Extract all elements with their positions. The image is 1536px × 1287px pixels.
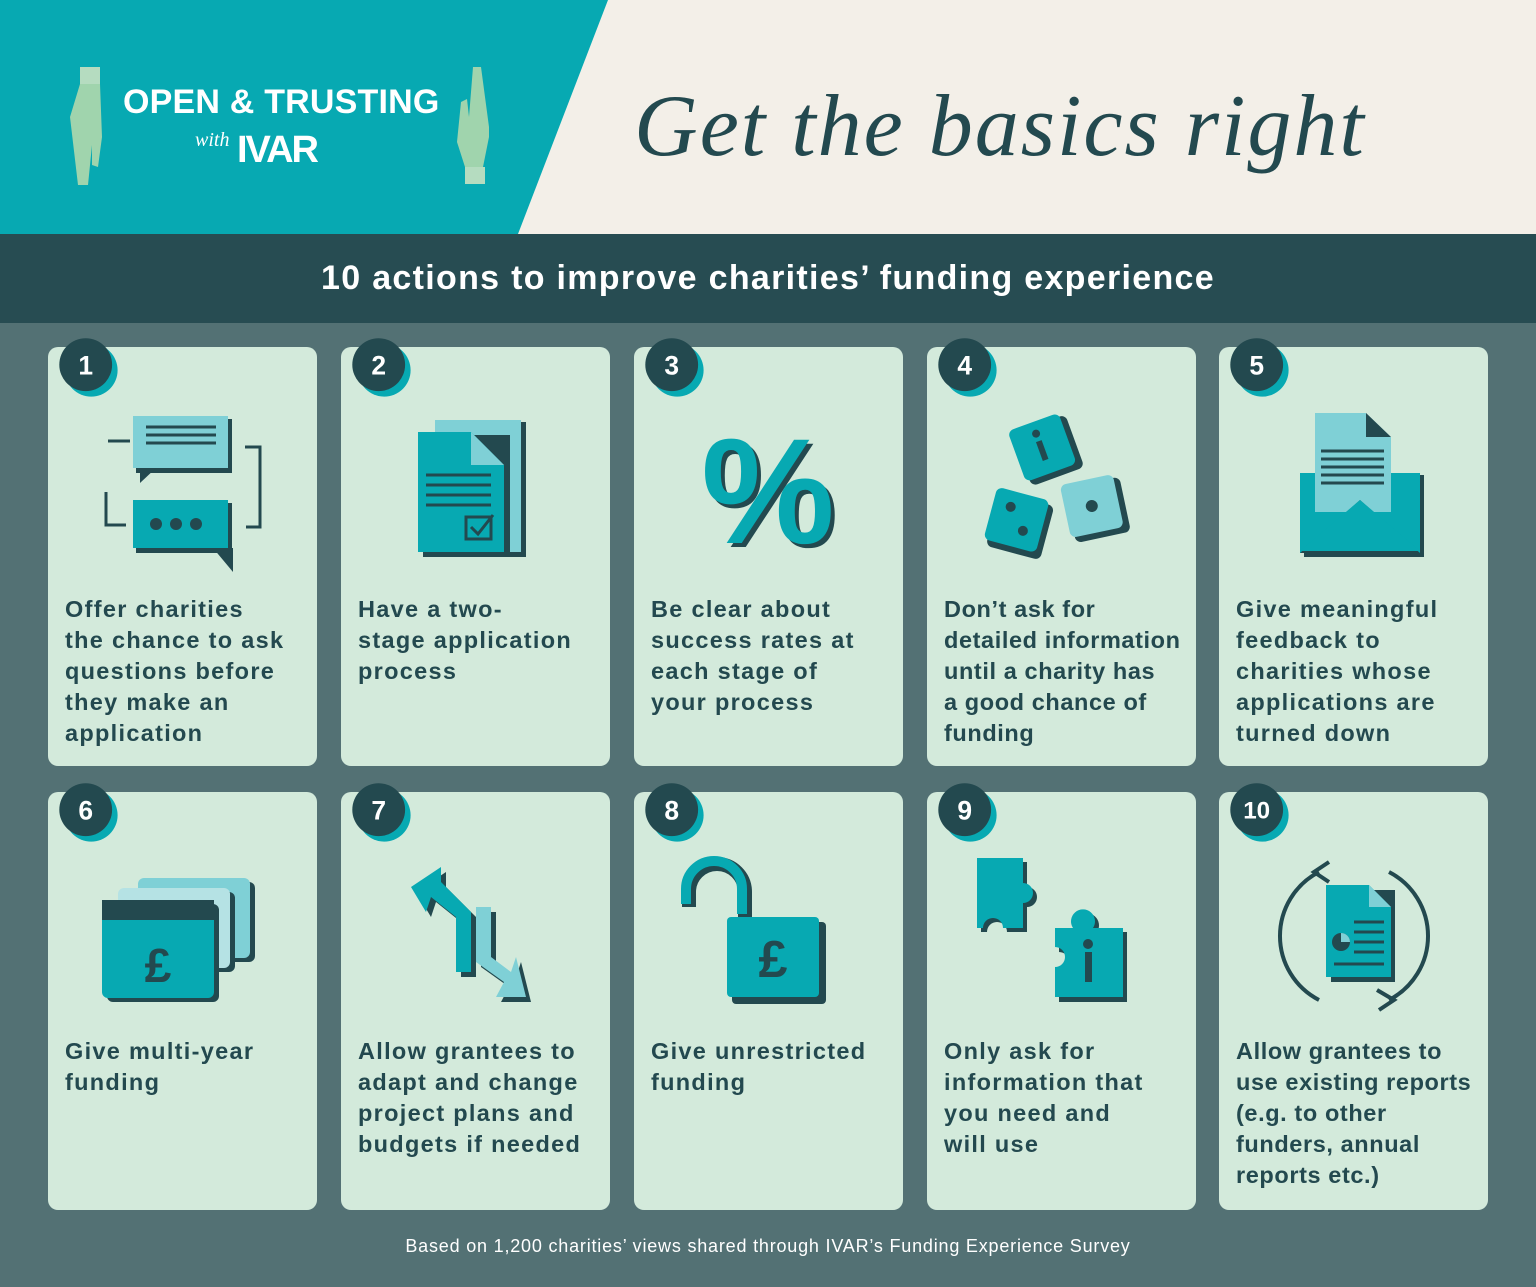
- icon: left hand: [70, 67, 102, 185]
- card 8: [634, 792, 903, 1210]
- text 7: budgets if needed: [358, 1131, 581, 1157]
- subtitle band: [0, 234, 1536, 323]
- text 6: funding: [65, 1069, 160, 1095]
- card 2: [341, 347, 610, 766]
- icon: percent: %: [701, 407, 835, 575]
- footer note: Based on 1,200 charities’ views shared through IVAR’s Funding Experience Survey: [405, 1236, 1131, 1256]
- text 8: funding: [651, 1069, 746, 1095]
- text 1: application: [65, 720, 203, 746]
- text 10: funders, annual: [1236, 1131, 1420, 1157]
- text 6: Give multi-year: [65, 1038, 254, 1064]
- icon: padlock: [681, 856, 826, 1004]
- text 3: your process: [651, 689, 814, 715]
- number 4: [938, 338, 997, 397]
- logo: IVAR: [237, 129, 317, 171]
- logo text: OPEN & TRUSTING: [123, 83, 440, 121]
- text 9: [944, 1038, 1144, 1157]
- number 1: [59, 338, 118, 397]
- icon: dice: [984, 414, 1130, 559]
- text 5: feedback to: [1236, 627, 1381, 653]
- number 6: 6: [78, 796, 93, 826]
- icon: calendars: [102, 878, 255, 1002]
- card 6: [48, 792, 317, 1210]
- text 9: will use: [944, 1131, 1039, 1157]
- text 5: applications are: [1236, 689, 1436, 715]
- text 4: until a charity has: [944, 658, 1155, 684]
- number 6: [59, 783, 118, 842]
- text 10: [1236, 1038, 1471, 1188]
- text 5: Give meaningful: [1236, 596, 1438, 622]
- icon: arrows: [411, 867, 531, 1002]
- icon: percent: %: [705, 411, 839, 579]
- card 1: [48, 347, 317, 766]
- number 8: 8: [664, 796, 679, 826]
- title: Get the basics right: [634, 78, 1366, 175]
- number 9: 9: [957, 796, 972, 826]
- text 5: charities whose: [1236, 658, 1432, 684]
- header teal panel: [0, 0, 608, 234]
- number 5: [1230, 338, 1289, 397]
- number 7: 7: [371, 796, 386, 826]
- text 2: [358, 596, 572, 684]
- text 4: detailed information: [944, 627, 1181, 653]
- text 10: Allow grantees to: [1236, 1038, 1442, 1064]
- text 8: Give unrestricted: [651, 1038, 866, 1064]
- text 8: [651, 1038, 866, 1095]
- icon: right hand: [457, 67, 489, 184]
- text 2: stage application: [358, 627, 572, 653]
- text 3: Be clear about: [651, 596, 831, 622]
- text 1: questions before: [65, 658, 275, 684]
- text 9: Only ask for: [944, 1038, 1095, 1064]
- text 4: [944, 596, 1181, 746]
- text 4: Don’t ask for: [944, 596, 1095, 622]
- text 7: Allow grantees to: [358, 1038, 576, 1064]
- text 1: Offer charities: [65, 596, 244, 622]
- text 3: [651, 596, 855, 715]
- icon: cycle report: [1278, 860, 1430, 1012]
- text 10: use existing reports: [1236, 1069, 1471, 1095]
- text 9: information that: [944, 1069, 1144, 1095]
- text 3: each stage of: [651, 658, 818, 684]
- logo: with: [195, 129, 229, 151]
- number 9: [938, 783, 997, 842]
- card 5: [1219, 347, 1488, 766]
- card 10: [1219, 792, 1488, 1210]
- card 4: [927, 347, 1196, 766]
- text 4: funding: [944, 720, 1034, 746]
- text 7: project plans and: [358, 1100, 575, 1126]
- text 2: process: [358, 658, 457, 684]
- number 1: 1: [78, 351, 93, 381]
- icon: puzzle: [977, 858, 1127, 1002]
- icon: documents: [418, 420, 526, 557]
- card 7: [341, 792, 610, 1210]
- text 1: they make an: [65, 689, 230, 715]
- header background: [0, 0, 1536, 234]
- text 6: [65, 1038, 254, 1095]
- icon: padlock: £: [759, 931, 788, 989]
- number 10: [1230, 783, 1289, 842]
- number 5: 5: [1249, 351, 1264, 381]
- text 1: [65, 596, 284, 746]
- text 4: a good chance of: [944, 689, 1147, 715]
- number 10: 10: [1243, 797, 1270, 824]
- card 9: [927, 792, 1196, 1210]
- text 7: adapt and change: [358, 1069, 579, 1095]
- text 5: turned down: [1236, 720, 1391, 746]
- number 3: 3: [664, 351, 679, 381]
- text 3: success rates at: [651, 627, 855, 653]
- number 7: [352, 783, 411, 842]
- number 3: [645, 338, 704, 397]
- text 2: Have a two-: [358, 596, 503, 622]
- icon: chat bubbles: [104, 416, 262, 572]
- number 2: 2: [371, 351, 386, 381]
- number 2: [352, 338, 411, 397]
- text 5: [1236, 596, 1438, 746]
- number 8: [645, 783, 704, 842]
- text 1: the chance to ask: [65, 627, 284, 653]
- text 10: reports etc.): [1236, 1162, 1380, 1188]
- icon: calendars: £: [145, 940, 172, 993]
- subtitle band: 10 actions to improve charities’ funding experience: [321, 259, 1215, 297]
- text 9: you need and: [944, 1100, 1111, 1126]
- number 4: 4: [957, 351, 972, 381]
- icon: envelope: [1300, 413, 1424, 557]
- logo: [70, 67, 489, 185]
- text 10: (e.g. to other: [1236, 1100, 1387, 1126]
- card 3: [634, 347, 903, 766]
- text 7: [358, 1038, 581, 1157]
